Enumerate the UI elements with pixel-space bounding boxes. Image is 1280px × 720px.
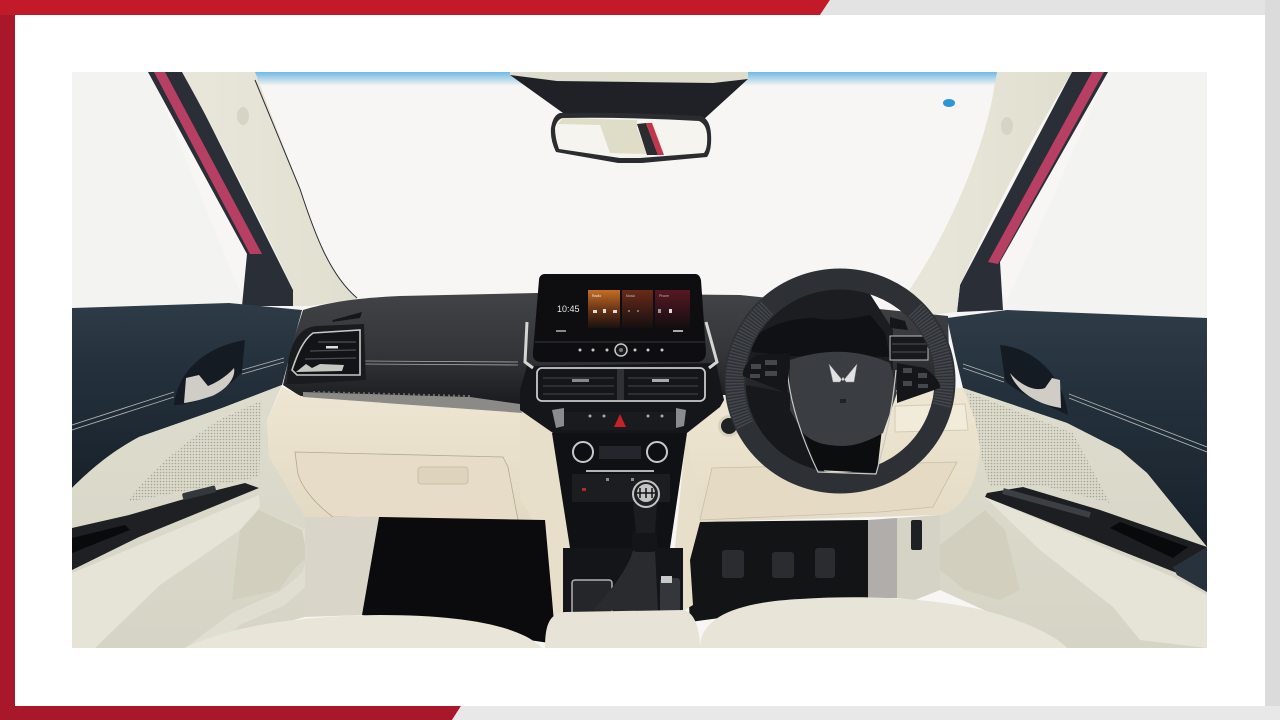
footwell: driver <box>684 520 868 622</box>
windshield edge left <box>255 80 357 298</box>
upper console tray <box>520 363 724 433</box>
right spoke controls <box>897 363 940 403</box>
left dash vent top <box>332 312 362 322</box>
left door pocket <box>187 566 305 647</box>
hub chrome trim <box>787 360 896 474</box>
frame: right grey bar <box>1265 0 1280 720</box>
lower spoke black <box>800 420 883 473</box>
mirror mount <box>510 75 748 120</box>
start button <box>718 415 740 437</box>
perforated leather rim sections <box>735 308 767 425</box>
footwell side panel right <box>868 518 897 598</box>
right door armrest cream <box>985 497 1207 648</box>
windshield sky strip <box>255 72 1000 86</box>
right door speaker grille <box>967 392 1110 503</box>
seats <box>185 597 1067 648</box>
steering wheel <box>735 279 945 483</box>
windows background <box>72 72 1207 648</box>
centre AC vents <box>537 368 705 401</box>
left door armrest cream <box>72 495 260 648</box>
right dash vents <box>890 317 928 360</box>
right door upper panel <box>947 310 1207 547</box>
left door stitching <box>72 358 284 430</box>
left door speaker grille <box>127 400 262 502</box>
driver lower panel outline <box>700 462 957 520</box>
right side window <box>1003 72 1207 318</box>
infotainment screen: Phone <box>659 294 669 298</box>
interior photo <box>72 72 1207 648</box>
instrument cluster hood <box>735 287 893 375</box>
frame: bottom red band <box>0 706 461 720</box>
Mahindra logo <box>829 364 857 382</box>
volume knob <box>615 344 627 356</box>
rear-view mirror <box>551 113 711 163</box>
left side window <box>72 72 245 307</box>
left door armrest <box>72 483 259 570</box>
driver dash cream lower <box>675 388 980 548</box>
roof headliner <box>510 72 748 83</box>
right door pocket <box>940 510 1017 580</box>
side chrome accents <box>552 408 564 428</box>
footwell side panel left <box>305 517 379 617</box>
infotainment screen: Music <box>626 294 635 298</box>
left A pillar <box>182 72 357 306</box>
infotainment screen <box>533 274 706 362</box>
frame: bottom grey band <box>452 706 1280 720</box>
screen surround chrome <box>525 322 717 368</box>
left door frame <box>148 72 293 306</box>
left door handle <box>174 340 245 405</box>
screen labels: Radio <box>592 294 601 298</box>
right pillar badge <box>1001 117 1013 135</box>
pedals <box>722 548 835 578</box>
right door handle <box>1000 345 1068 415</box>
frame: top grey band <box>820 0 1280 15</box>
climate knobs <box>573 442 667 472</box>
right A pillar <box>905 72 1072 315</box>
right door frame <box>957 72 1108 312</box>
footwell: passenger <box>362 517 556 644</box>
left AC vent <box>287 324 366 384</box>
right door stitching <box>963 364 1207 452</box>
right door armrest <box>985 487 1207 592</box>
left seat <box>185 615 542 648</box>
sticker dot <box>943 99 955 107</box>
left spoke controls <box>743 353 790 393</box>
glove box <box>295 452 518 520</box>
bonnet release lever <box>911 520 922 550</box>
rim <box>735 279 945 483</box>
driver switch panel <box>895 404 968 432</box>
console right cream strip <box>676 435 700 611</box>
frame: top red band <box>0 0 830 15</box>
dash stitching <box>363 361 518 365</box>
dashboard top dark panel <box>283 293 950 410</box>
centre console stack <box>520 363 724 548</box>
left door upper panel <box>72 303 302 488</box>
left door lower panel <box>72 385 305 648</box>
gear lever <box>593 481 659 612</box>
left pillar badge <box>237 107 249 125</box>
hazard button row <box>562 412 676 430</box>
right door lower panel <box>940 388 1207 648</box>
centre armrest <box>545 610 700 648</box>
lower switches <box>572 474 670 502</box>
right seat <box>700 597 1067 648</box>
chrome and sparkle trim <box>303 392 522 413</box>
frame: left red bar <box>0 0 15 720</box>
console left cream strip <box>520 410 570 620</box>
steering column <box>745 385 825 474</box>
clock: 10:45 <box>557 304 580 314</box>
passenger dash cream lower <box>267 387 553 520</box>
hub <box>790 352 897 446</box>
gear tray <box>563 548 683 614</box>
